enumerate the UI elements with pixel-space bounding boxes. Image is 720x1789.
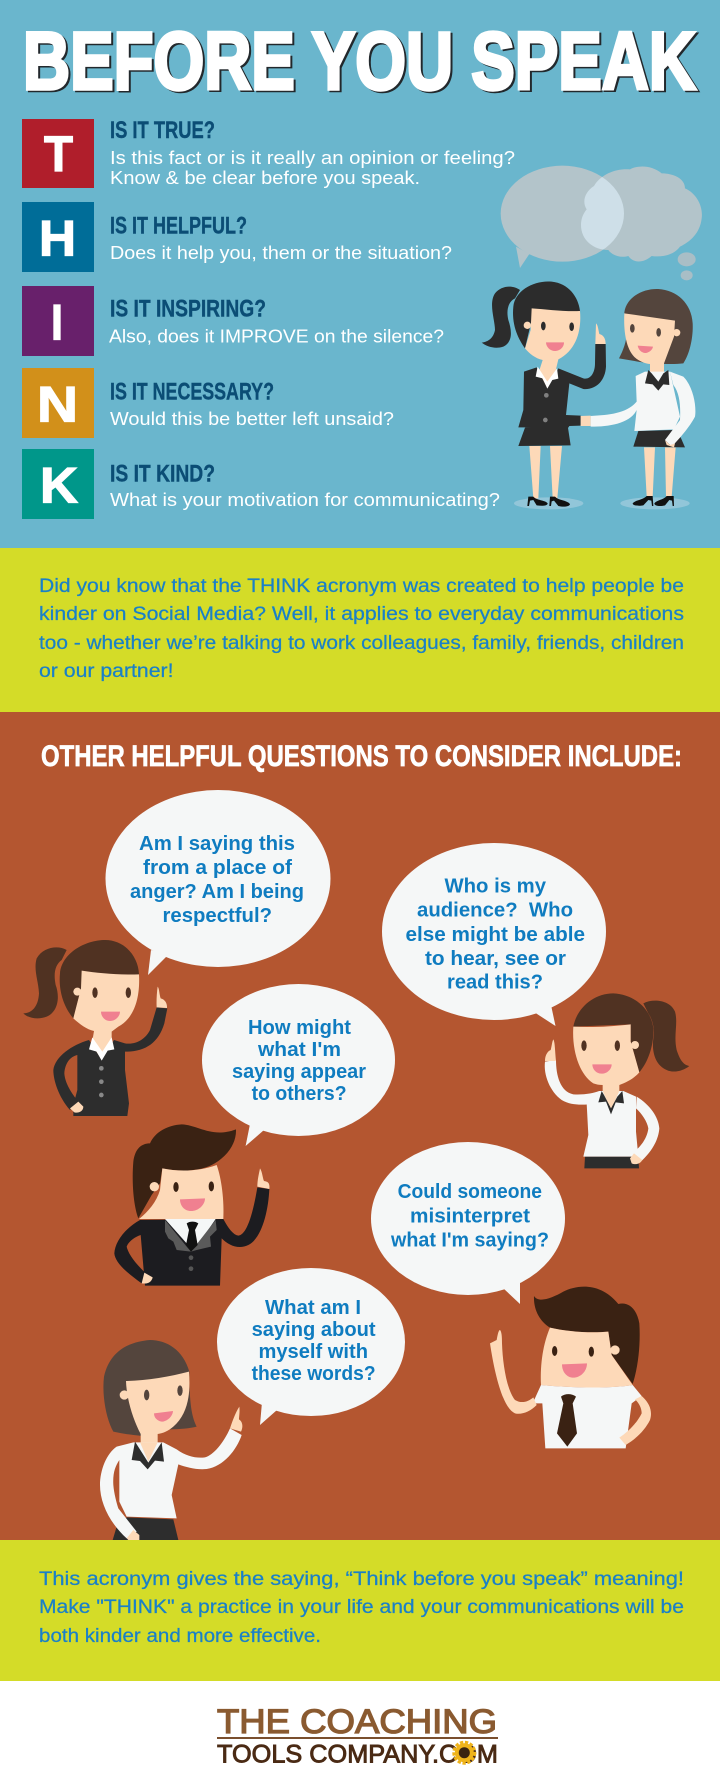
speech bubble: audience — [382, 843, 606, 1026]
panel: did you know: or our partner! — [39, 660, 174, 682]
speech bubble: appear to others — [202, 984, 395, 1146]
speech bubble: anger: Am I saying this — [139, 833, 295, 855]
item: is it kind: What is your motivation for communicating? — [110, 489, 500, 510]
panel: closing message — [0, 1540, 720, 1681]
speech bubble: about myself: What am I — [265, 1297, 361, 1319]
letter tile: I — [22, 286, 94, 356]
logo: The Coaching Tools Company — [0, 1681, 720, 1789]
item: is it necessary — [110, 378, 394, 429]
panel: other helpful questions — [0, 712, 720, 1540]
panel: closing message: both kinder and more effective. — [39, 1625, 321, 1647]
speech bubble: appear to others: to others? — [252, 1083, 347, 1105]
letter tile: N: N — [37, 376, 78, 432]
character: woman with bob haircut — [100, 1340, 242, 1540]
character: woman in black jacket — [23, 940, 167, 1116]
speech bubble: appear to others: what I'm — [257, 1039, 341, 1061]
speech bubble: anger: anger? Am I being — [130, 881, 304, 903]
panel: THINK acronym — [0, 0, 720, 548]
speech bubble: audience: audience? Who — [417, 900, 573, 922]
item: is it inspiring: IS IT INSPIRING? — [110, 296, 266, 322]
speech bubble: misinterpret: what I'm saying? — [390, 1230, 549, 1252]
speech bubble: audience: read this? — [447, 972, 543, 994]
panel: did you know: Did you know that the THINK acronym was created to help people be — [39, 575, 684, 597]
speech bubble: misinterpret: Could someone — [398, 1181, 542, 1203]
item: is it inspiring — [109, 296, 444, 346]
speech bubble: appear to others: saying appear — [232, 1061, 366, 1083]
icon: speech bubble — [501, 166, 624, 268]
item: is it true: IS IT TRUE? — [110, 117, 215, 144]
item: is it kind — [110, 460, 500, 510]
illustration: two women with overlapping bubbles — [482, 166, 702, 509]
logo: The Coaching Tools Company: THE COACHING — [217, 1703, 497, 1741]
panel: did you know: kinder on Social Media? Well, it applies to everyday communications — [39, 603, 684, 625]
letter tile: T — [22, 119, 94, 188]
speech bubble: audience: else might be able — [406, 924, 585, 946]
letter tile: N — [22, 368, 94, 438]
speech bubble: audience: to hear, see or — [425, 948, 566, 970]
speech bubble: appear to others: How might — [248, 1017, 351, 1039]
panel: closing message: This acronym gives the saying, “Think before you speak” meaning! — [39, 1568, 684, 1590]
icon: thought bubble — [581, 166, 702, 280]
speech bubble: misinterpret — [371, 1142, 565, 1304]
panel: did you know: too - whether we’re talking to work colleagues, family, friends, children — [39, 632, 684, 654]
item: is it kind: IS IT KIND? — [110, 460, 215, 488]
character: woman with brown bob — [591, 289, 695, 509]
item: is it inspiring: Also, does it IMPROVE on the silence? — [109, 326, 444, 346]
letter tile: H: H — [39, 210, 76, 266]
item: is it true: Is this fact or is it really an opinion or feeling? — [110, 147, 515, 168]
logo: The Coaching Tools Company: TOOLS COMPANY.COM — [217, 1741, 498, 1769]
icon: sunflower — [455, 1743, 474, 1762]
panel: closing message: Make "THINK" a practice in your life and your communications will be — [39, 1596, 684, 1618]
speech bubble: audience: Who is my — [444, 876, 547, 898]
item: is it necessary: Would this be better left unsaid? — [110, 408, 394, 429]
item: is it helpful: IS IT HELPFUL? — [110, 212, 247, 240]
letter tile: I: I — [51, 294, 63, 350]
letter tile: K: K — [40, 458, 78, 514]
character: woman in white shirt — [545, 993, 689, 1168]
letter tile: T: T — [44, 126, 73, 182]
speech bubble: anger: respectful? — [162, 905, 272, 927]
speech bubble: about myself — [217, 1268, 405, 1425]
speech bubble: anger: from a place of — [143, 857, 292, 879]
item: is it true — [110, 117, 515, 188]
speech bubble: about myself: saying about — [252, 1319, 376, 1341]
item: is it necessary: IS IT NECESSARY? — [110, 378, 274, 406]
speech bubble: anger — [106, 790, 330, 975]
character: woman with black ponytail — [482, 281, 606, 509]
panel: did you know — [0, 548, 720, 712]
letter tile: H — [22, 202, 94, 272]
speech bubble: misinterpret: misinterpret — [410, 1206, 530, 1228]
item: is it true: Know & be clear before you speak. — [110, 167, 420, 188]
item: is it helpful: Does it help you, them or the situation? — [110, 242, 452, 263]
character: man in black suit — [114, 1124, 269, 1286]
speech bubble: about myself: these words? — [252, 1363, 376, 1385]
letter tile: K — [22, 449, 94, 519]
speech bubble: about myself: myself with — [258, 1341, 368, 1363]
item: is it helpful — [110, 212, 452, 263]
character: man in white shirt — [490, 1287, 651, 1448]
